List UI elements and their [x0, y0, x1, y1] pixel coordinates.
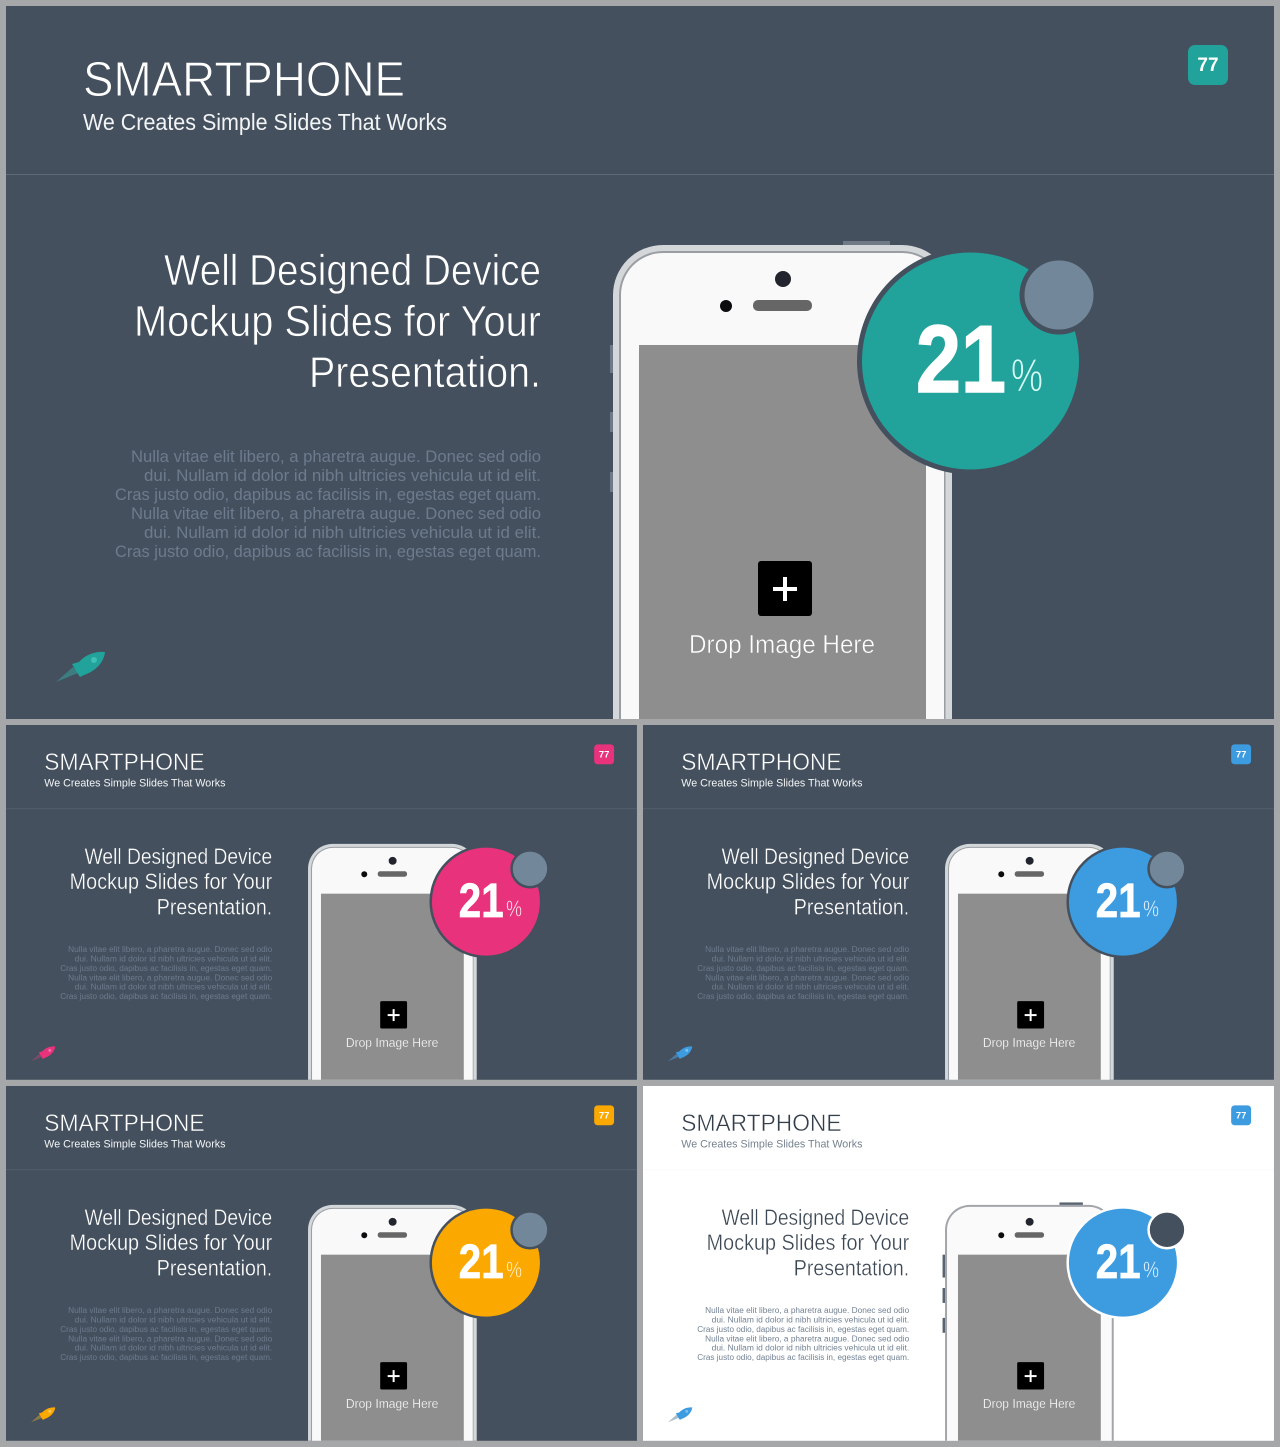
percentage circle [1068, 1207, 1185, 1318]
title: SMARTPHONE [44, 1110, 205, 1137]
heading: Presentation. [794, 1256, 909, 1281]
body text: dui. Nullam id dolor id nibh ultricies vehicula ut id elit. [144, 467, 541, 485]
body text: Cras justo odio, dapibus ac facilisis in, egestas eget quam. [60, 1353, 272, 1362]
body text: Nulla vitae elit libero, a pharetra augue. Donec sed odio [705, 1334, 910, 1343]
phone mockup [610, 241, 952, 719]
phone mockup [945, 844, 1114, 1080]
heading: Well Designed Device [722, 844, 909, 869]
body text: Nulla vitae elit libero, a pharetra augue. Donec sed odio [68, 973, 273, 982]
heading: Presentation. [157, 1256, 272, 1281]
body text: Cras justo odio, dapibus ac facilisis in, egestas eget quam. [697, 1325, 909, 1334]
icon: rocket [31, 1407, 55, 1422]
badge: page number: 77 [599, 1110, 609, 1121]
phone mockup [308, 844, 477, 1080]
phone camera [775, 271, 791, 287]
heading: Well Designed Device [722, 1205, 909, 1230]
phone screen [639, 345, 926, 719]
accent dot [512, 1211, 548, 1248]
body text: dui. Nullam id dolor id nibh ultricies vehicula ut id elit. [712, 983, 909, 992]
panel: blue dark slide [643, 725, 1274, 1080]
percentage circle [1068, 846, 1185, 957]
badge: page number [1231, 1105, 1251, 1125]
body text: Cras justo odio, dapibus ac facilisis in, egestas eget quam. [697, 1353, 909, 1362]
body text: Nulla vitae elit libero, a pharetra augue. Donec sed odio [131, 505, 541, 523]
heading: Presentation. [157, 895, 272, 920]
heading: Presentation. [794, 895, 909, 920]
body text: Nulla vitae elit libero, a pharetra augue. Donec sed odio [131, 448, 541, 466]
phone screen [958, 1255, 1101, 1441]
body text [697, 945, 910, 1001]
percent sign: % [506, 1257, 522, 1283]
panel: white slide [643, 1086, 1274, 1441]
title: SMARTPHONE [681, 1110, 842, 1137]
body text: dui. Nullam id dolor id nibh ultricies vehicula ut id elit. [144, 524, 541, 542]
phone camera [1026, 857, 1034, 865]
icon: rocket [668, 1046, 692, 1061]
percentage circle [431, 846, 548, 957]
heading [70, 844, 272, 920]
title: SMARTPHONE [83, 53, 405, 107]
subtitle: We Creates Simple Slides That Works [44, 778, 226, 790]
plus button [1017, 1001, 1044, 1029]
body text: Nulla vitae elit libero, a pharetra augue. Donec sed odio [705, 1306, 910, 1315]
phone camera [1026, 1218, 1034, 1226]
heading: Mockup Slides for Your [70, 869, 272, 894]
title: SMARTPHONE [44, 749, 205, 776]
badge: page number [1231, 744, 1251, 764]
plus button [1017, 1362, 1044, 1390]
badge: page number [594, 1105, 614, 1125]
phone camera [389, 857, 397, 865]
body text: dui. Nullam id dolor id nibh ultricies vehicula ut id elit. [712, 1315, 909, 1324]
accent dot [1149, 850, 1185, 887]
plus button [758, 561, 812, 616]
plus button [380, 1001, 407, 1029]
body text: dui. Nullam id dolor id nibh ultricies vehicula ut id elit. [75, 1344, 272, 1353]
panel: main teal slide [6, 6, 1274, 719]
value: 21 [1096, 875, 1141, 928]
phone sensor [998, 871, 1004, 877]
heading [707, 844, 909, 920]
body text: Nulla vitae elit libero, a pharetra augue. Donec sed odio [705, 945, 910, 954]
phone speaker [1015, 1232, 1044, 1238]
percent sign: % [1143, 1257, 1159, 1283]
body text: dui. Nullam id dolor id nibh ultricies vehicula ut id elit. [75, 983, 272, 992]
heading: Mockup Slides for Your [707, 869, 909, 894]
phone screen [321, 1255, 464, 1441]
phone speaker [753, 300, 812, 311]
phone speaker [378, 1232, 407, 1238]
body text: Cras justo odio, dapibus ac facilisis in, egestas eget quam. [60, 1325, 272, 1334]
badge: page number [594, 744, 614, 764]
badge: page number: 77 [1236, 1110, 1246, 1121]
subtitle: We Creates Simple Slides That Works [681, 778, 863, 790]
phone mockup [308, 1205, 477, 1441]
phone sensor [720, 300, 732, 312]
body text [697, 1306, 910, 1362]
heading: Well Designed Device [85, 844, 272, 869]
phone camera [389, 1218, 397, 1226]
icon: rocket [56, 652, 105, 682]
body text: Cras justo odio, dapibus ac facilisis in, egestas eget quam. [697, 992, 909, 1001]
badge: page number: 77 [1197, 55, 1219, 76]
body text: dui. Nullam id dolor id nibh ultricies vehicula ut id elit. [712, 954, 909, 963]
phone mockup [943, 1202, 1114, 1441]
heading: Well Designed Device [85, 1205, 272, 1230]
drop image label: Drop Image Here [983, 1035, 1075, 1050]
icon: rocket [31, 1046, 55, 1061]
percent sign: % [1011, 349, 1043, 401]
body text: Cras justo odio, dapibus ac facilisis in, egestas eget quam. [60, 964, 272, 973]
percent sign: % [1143, 896, 1159, 922]
percentage circle [431, 1207, 548, 1318]
body text: Nulla vitae elit libero, a pharetra augue. Donec sed odio [705, 973, 910, 982]
accent dot [512, 850, 548, 887]
phone screen [321, 894, 464, 1080]
accent dot [1022, 258, 1096, 332]
heading [70, 1205, 272, 1281]
phone speaker [378, 871, 407, 877]
drop image label: Drop Image Here [346, 1396, 438, 1411]
badge: page number: 77 [599, 749, 609, 760]
value: 21 [459, 1236, 504, 1289]
body text: dui. Nullam id dolor id nibh ultricies vehicula ut id elit. [75, 1315, 272, 1324]
badge: page number: 77 [1236, 749, 1246, 760]
heading: Presentation. [309, 348, 541, 397]
phone screen [958, 894, 1101, 1080]
body text: Cras justo odio, dapibus ac facilisis in, egestas eget quam. [60, 992, 272, 1001]
body text [115, 448, 541, 561]
heading [707, 1205, 909, 1281]
heading [134, 246, 541, 397]
heading: Well Designed Device [164, 246, 541, 295]
heading: Mockup Slides for Your [134, 297, 541, 346]
accent dot [1149, 1211, 1185, 1248]
percent sign: % [506, 896, 522, 922]
drop image label: Drop Image Here [983, 1396, 1075, 1411]
badge: page number [1188, 45, 1228, 85]
body text: Nulla vitae elit libero, a pharetra augue. Donec sed odio [68, 1306, 273, 1315]
body text: Nulla vitae elit libero, a pharetra augue. Donec sed odio [68, 945, 273, 954]
heading: Mockup Slides for Your [707, 1230, 909, 1255]
body text: Cras justo odio, dapibus ac facilisis in, egestas eget quam. [115, 543, 541, 561]
body text [60, 1306, 273, 1362]
icon: rocket [668, 1407, 692, 1422]
body text: Cras justo odio, dapibus ac facilisis in, egestas eget quam. [115, 486, 541, 504]
phone sensor [361, 1232, 367, 1238]
body text [60, 945, 273, 1001]
body text: Cras justo odio, dapibus ac facilisis in, egestas eget quam. [697, 964, 909, 973]
body text: Nulla vitae elit libero, a pharetra augue. Donec sed odio [68, 1334, 273, 1343]
phone speaker [1015, 871, 1044, 877]
percentage circle [860, 250, 1096, 472]
drop image label: Drop Image Here [346, 1035, 438, 1050]
body text: dui. Nullam id dolor id nibh ultricies vehicula ut id elit. [75, 954, 272, 963]
value: 21 [1096, 1236, 1141, 1289]
value: 21 [916, 306, 1006, 413]
subtitle: We Creates Simple Slides That Works [681, 1139, 863, 1151]
subtitle: We Creates Simple Slides That Works [44, 1139, 226, 1151]
body text: dui. Nullam id dolor id nibh ultricies vehicula ut id elit. [712, 1344, 909, 1353]
subtitle: We Creates Simple Slides That Works [83, 109, 447, 135]
phone sensor [361, 871, 367, 877]
value: 21 [459, 875, 504, 928]
panel: amber slide [6, 1086, 637, 1441]
heading: Mockup Slides for Your [70, 1230, 272, 1255]
drop image label: Drop Image Here [689, 629, 875, 659]
title: SMARTPHONE [681, 749, 842, 776]
plus button [380, 1362, 407, 1390]
panel: pink slide [6, 725, 637, 1080]
phone sensor [998, 1232, 1004, 1238]
